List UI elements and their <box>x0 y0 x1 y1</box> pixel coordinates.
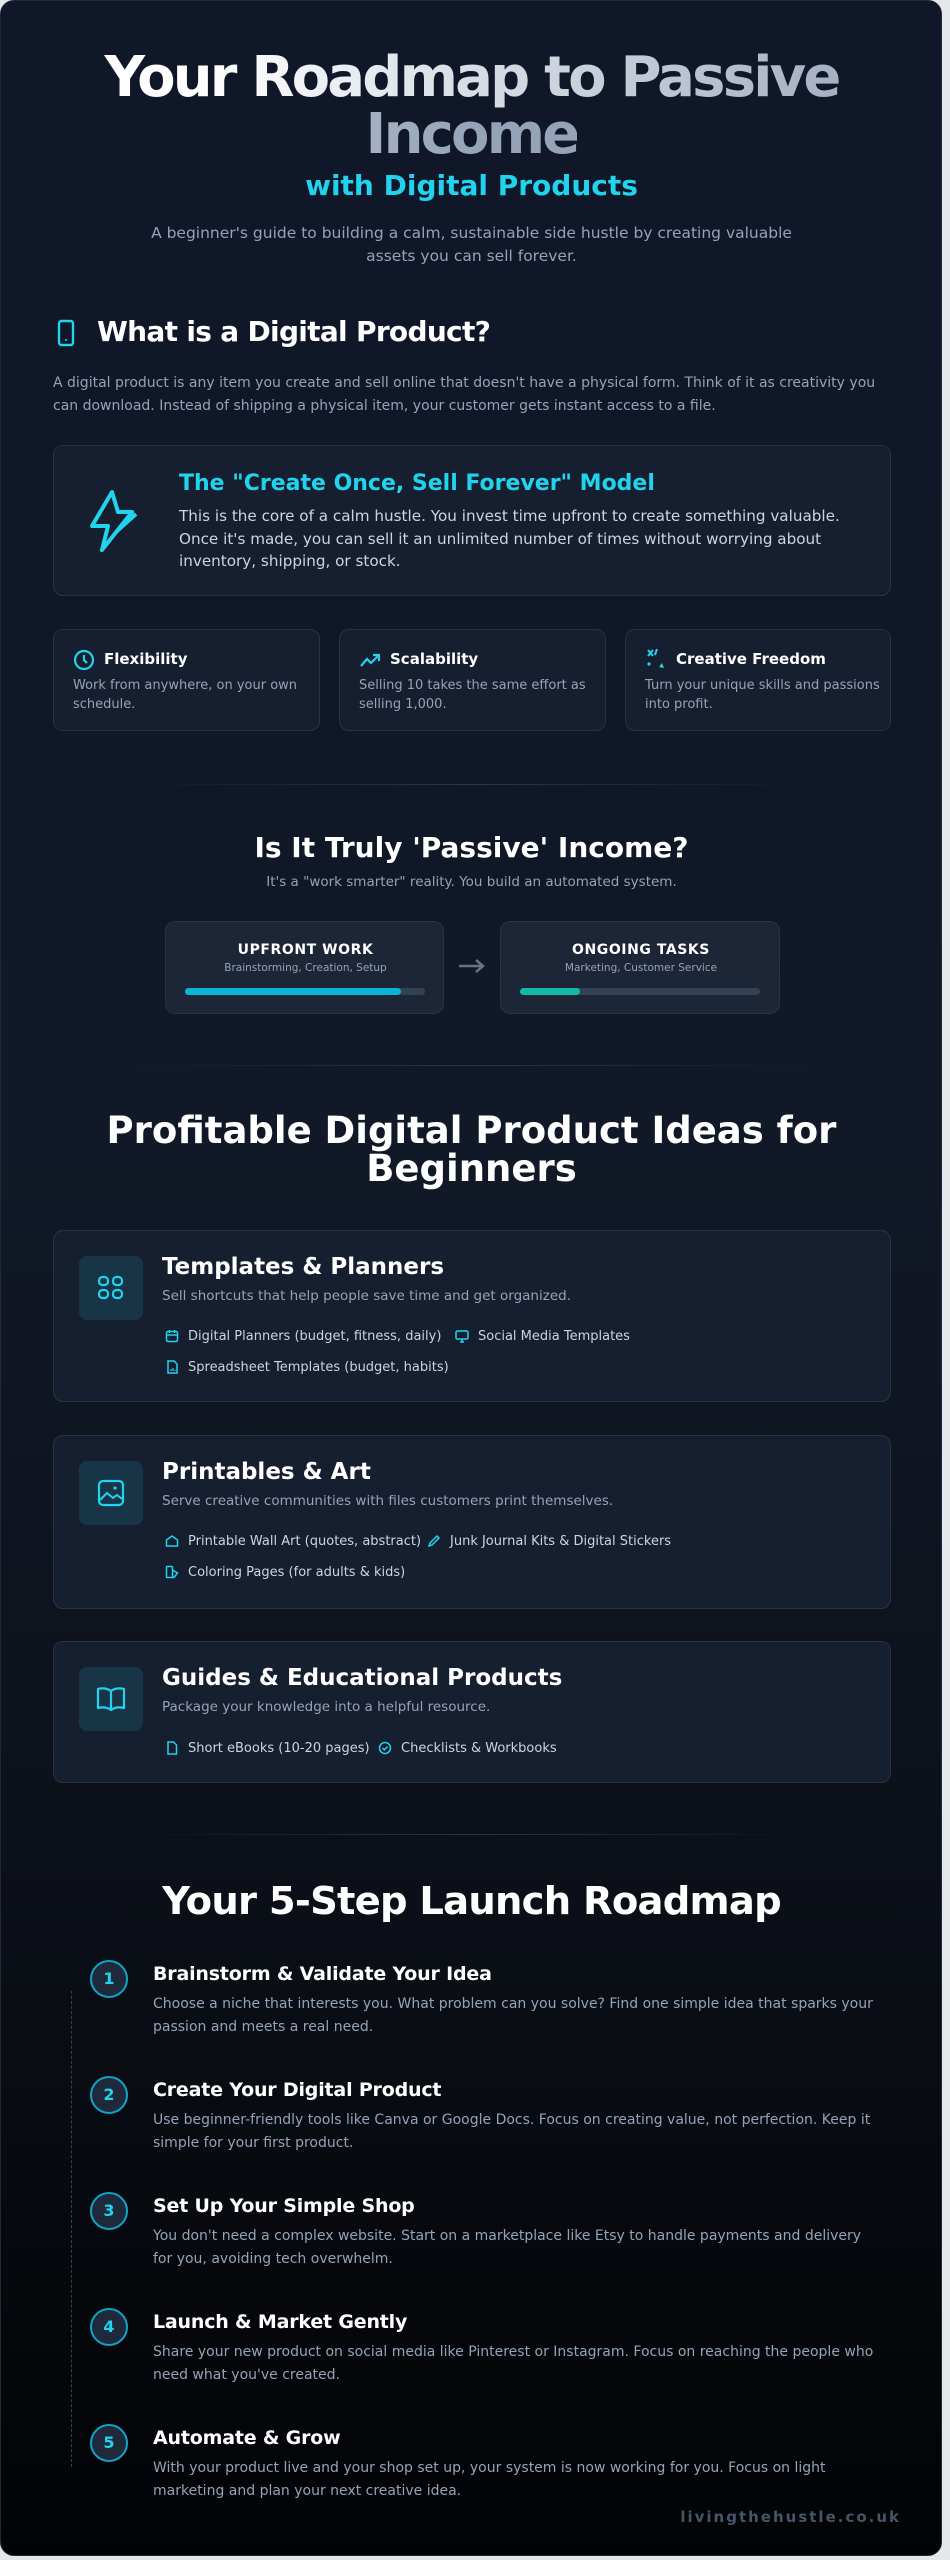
icon: clock <box>74 650 94 670</box>
panel: creative freedom <box>625 629 891 731</box>
panel: templates & planners: Sell shortcuts that help people save time and get organized. <box>162 1288 571 1304</box>
panel: templates & planners: Spreadsheet Templates (budget, habits) <box>188 1360 449 1375</box>
timeline dashed line <box>71 1991 72 2467</box>
panel: printables & art: Junk Journal Kits & Digital Stickers <box>450 1534 671 1549</box>
intro text: A beginner's guide to building a calm, sustainable side hustle by creating valuable assets you can sell forever. <box>151 224 792 265</box>
subtitle: with Digital Products <box>305 169 638 202</box>
step 4: Share your new product on social media like Pinterest or Instagram. Focus on reaching the people who need what you've created. <box>153 2344 873 2383</box>
arrow <box>459 959 485 973</box>
icon: trend <box>360 654 380 667</box>
panel: scalability: Scalability <box>390 650 478 668</box>
panel: flexibility <box>53 629 320 731</box>
panel: printables & art: Printables & Art <box>162 1459 371 1485</box>
step 3: You don't need a complex website. Start on a marketplace like Etsy to handle payments and delivery for you, avoiding tech overwhelm. <box>153 2228 861 2267</box>
panel: creative freedom: Turn your unique skills and passions into profit. <box>645 678 880 712</box>
panel: printables & art <box>53 1435 891 1609</box>
step 1: 1 <box>103 1969 115 1988</box>
panel: templates & planners: Templates & Planners <box>162 1254 444 1280</box>
heading: product ideas <box>107 1109 836 1190</box>
panel: printables & art: Coloring Pages (for adults & kids) <box>188 1565 405 1580</box>
heading: product ideas: Profitable Digital Product Ideas for <box>107 1109 836 1152</box>
footer brand: livingthehustle.co.uk <box>680 2508 901 2526</box>
title: Income <box>366 102 577 167</box>
panel: ongoing tasks: Marketing, Customer Service <box>565 962 717 974</box>
step 5: Automate & Grow <box>153 2427 340 2449</box>
icon: lightning <box>90 490 138 552</box>
step 5: 5 <box>103 2433 115 2452</box>
icon: grid <box>79 1256 143 1320</box>
panel: ongoing tasks: ONGOING TASKS <box>572 942 710 958</box>
step 1 <box>90 1960 873 2035</box>
model title: The "Create Once, Sell Forever" Model <box>179 471 655 496</box>
item list: Printable Wall Art (quotes, abstract) <box>188 1534 421 1549</box>
panel: printables & art: Serve creative communities with files customers print themselves. <box>162 1493 613 1509</box>
step 2: 2 <box>103 2085 115 2104</box>
bar: ongoing 25% <box>520 988 760 995</box>
panel: upfront work <box>165 921 444 1014</box>
panel: guides & educational <box>53 1641 891 1783</box>
step 3: 3 <box>103 2201 115 2220</box>
panel: ongoing tasks <box>500 921 780 1014</box>
step 4: 4 <box>103 2317 115 2336</box>
step 4: Launch & Market Gently <box>153 2311 407 2333</box>
title: Your Roadmap to Passive <box>104 45 839 110</box>
subheading: It's a "work smarter" reality. You build an automated system. <box>266 874 677 890</box>
icon: phone <box>58 320 74 346</box>
panel: create once model <box>53 445 891 596</box>
item list: Short eBooks (10-20 pages) <box>188 1741 370 1756</box>
panel: upfront work: UPFRONT WORK <box>238 942 373 958</box>
panel: guides & educational: Checklists & Workbooks <box>401 1741 557 1756</box>
heading: passive income: Is It Truly 'Passive' Income? <box>254 831 689 864</box>
panel: templates & planners: Social Media Templates <box>478 1329 630 1344</box>
step 5: With your product live and your shop set up, your system is now working for you. Focus on light marketing and plan your next creative idea. <box>153 2460 826 2499</box>
step 1: Brainstorm & Validate Your Idea <box>153 1963 492 1985</box>
heading: 5-step roadmap: Your 5-Step Launch Roadmap <box>162 1879 781 1924</box>
icon: sparkles <box>647 648 664 668</box>
definition paragraph: A digital product is any item you create and sell online that doesn't have a physical form. Think of it as creativity you can download. Instead of shipping a physical item, your customer gets instant access to a file. <box>53 375 875 414</box>
step 2: Use beginner-friendly tools like Canva or Google Docs. Focus on creating value, not perfection. Keep it simple for your first product. <box>153 2112 870 2151</box>
step 1: Choose a niche that interests you. What problem can you solve? Find one simple idea that sparks your passion and meets a real need. <box>153 1996 873 2035</box>
step 2: Create Your Digital Product <box>153 2079 441 2101</box>
bar: upfront 90% <box>185 988 425 995</box>
model text: This is the core of a calm hustle. You invest time upfront to create something valuable. Once it's made, you can sell it an unlimited number of times without worrying about inventory, shipping, or stock. <box>179 507 840 570</box>
panel: flexibility: Work from anywhere, on your own schedule. <box>73 678 297 712</box>
item list: Digital Planners (budget, fitness, daily) <box>188 1329 441 1344</box>
panel: guides & educational: Package your knowledge into a helpful resource. <box>162 1699 490 1715</box>
section heading: what is a digital product: What is a Digital Product? <box>97 315 490 348</box>
panel: scalability <box>339 629 606 731</box>
title <box>104 45 839 167</box>
panel: upfront work: Brainstorming, Creation, Setup <box>224 962 387 974</box>
panel: creative freedom: Creative Freedom <box>676 650 826 668</box>
icon: book <box>79 1667 143 1731</box>
panel: flexibility: Flexibility <box>104 650 188 668</box>
panel: templates & planners <box>53 1230 891 1402</box>
panel: guides & educational: Guides & Educational Products <box>162 1665 562 1691</box>
icon: image <box>79 1461 143 1525</box>
step 3: Set Up Your Simple Shop <box>153 2195 415 2217</box>
panel: scalability: Selling 10 takes the same effort as selling 1,000. <box>359 678 586 712</box>
heading: product ideas: Beginners <box>366 1147 577 1190</box>
